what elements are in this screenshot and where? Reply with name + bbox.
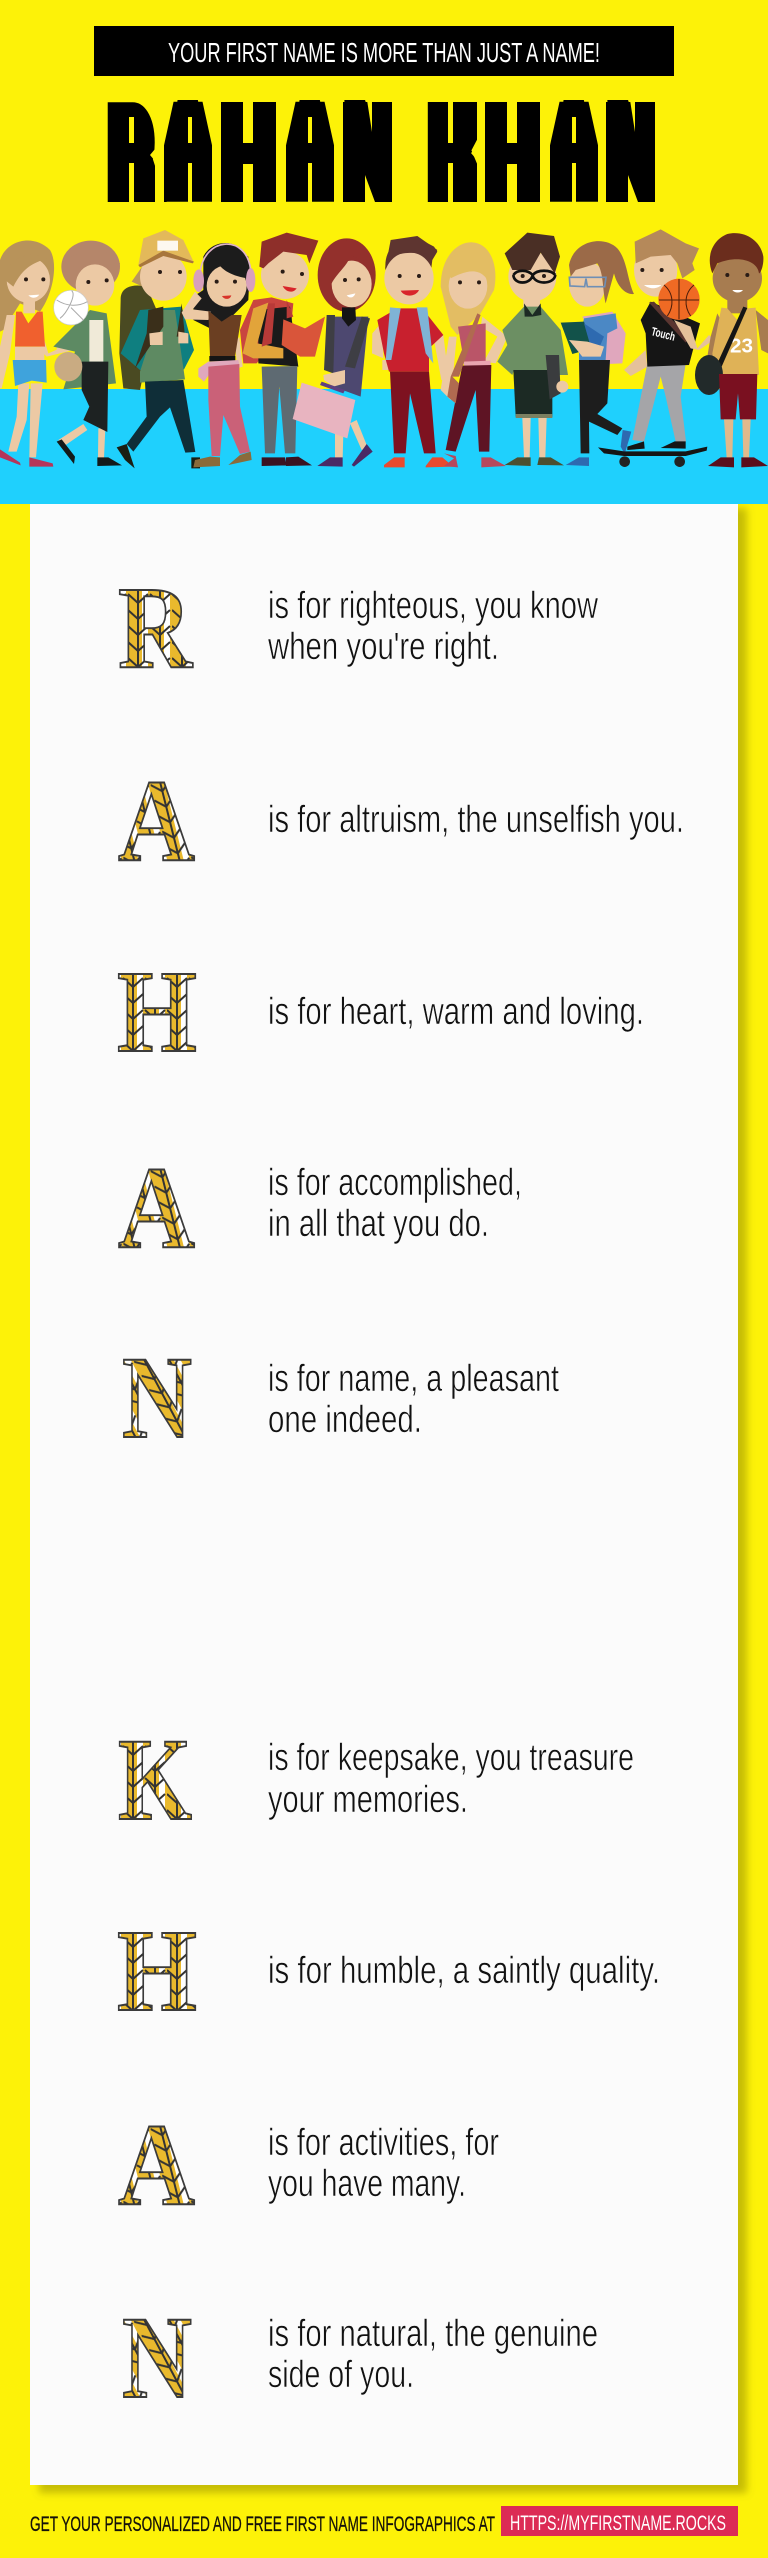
- row R: description: when you're right.: [267, 626, 499, 668]
- title: name: [118, 100, 644, 202]
- row A: description: in all that you do.: [268, 1203, 489, 1245]
- person 9: boy with glasses: [497, 233, 568, 466]
- person 3: hiker with backpack and cap: [117, 230, 200, 468]
- row K: description: [268, 1737, 634, 1821]
- row N: description: [268, 1358, 559, 1441]
- title: name: A: [559, 114, 589, 192]
- person 7: boy in red shirt: [372, 236, 453, 467]
- row H: description: is for humble, a saintly quality.: [268, 1950, 660, 1992]
- title: name: K: [439, 113, 465, 191]
- row A: description: [268, 1162, 522, 1245]
- footer call to action: GET YOUR PERSONALIZED AND FREE FIRST NAME INFOGRAPHICS AT: [30, 2513, 495, 2536]
- row N: description: is for natural, the genuine: [268, 2313, 598, 2355]
- person 4: girl with headphones: [182, 243, 255, 467]
- person 8: blonde girl: [441, 242, 507, 467]
- row N: description: is for name, a pleasant: [268, 1358, 559, 1400]
- row A: description: [268, 2122, 499, 2205]
- title: name: A: [295, 114, 325, 192]
- row H: description: is for heart, warm and loving.: [268, 991, 644, 1033]
- row A: letter icon: A: [118, 1142, 195, 1273]
- person 10: girl with ponytail and book: [561, 241, 634, 466]
- row A: description: is for activities, for: [268, 2122, 499, 2164]
- row H: letter icon: H: [117, 1905, 197, 2036]
- row A: description: you have many.: [268, 2163, 466, 2205]
- row R: letter icon: R: [118, 562, 194, 693]
- row A: description: is for accomplished,: [268, 1162, 522, 1204]
- row N: letter icon: N: [122, 2292, 192, 2423]
- blue floor band: [0, 389, 768, 504]
- person 12: boy with curly hair and tank top: 23: [730, 335, 753, 358]
- person 5: boy with book and red backpack: [240, 233, 325, 466]
- person 1: girl in orange top: [0, 241, 80, 467]
- row K: description: your memories.: [268, 1779, 468, 1821]
- row R: description: is for righteous, you know: [268, 585, 598, 627]
- row A: letter icon: A: [118, 2099, 195, 2230]
- person 12: boy with curly hair and tank top: [695, 233, 768, 467]
- tagline bar: [94, 26, 674, 76]
- illustration: group of twelve young people: [0, 229, 768, 468]
- white content panel: [30, 500, 738, 2485]
- row N: letter icon: N: [122, 1332, 192, 1463]
- title: name: R: [118, 113, 144, 191]
- row K: letter icon: K: [118, 1714, 192, 1845]
- title: name: N: [617, 113, 644, 191]
- title: name: A: [173, 114, 203, 192]
- title: name: H: [233, 114, 264, 192]
- person 2: girl with volleyball: [53, 241, 122, 466]
- person 11: boy on skateboard with basketball: [598, 229, 714, 467]
- person 6: girl with pink bag: [293, 238, 376, 467]
- title: name: N: [354, 113, 381, 191]
- row K: description: is for keepsake, you treasure: [268, 1737, 634, 1779]
- row R: description: [267, 585, 598, 668]
- row A: letter icon: A: [118, 755, 195, 886]
- person 11: boy on skateboard with basketball: Touch: [650, 324, 677, 344]
- row N: description: [268, 2313, 598, 2396]
- title: name: H: [497, 114, 528, 192]
- row N: description: side of you.: [268, 2354, 414, 2396]
- row N: description: one indeed.: [268, 1399, 422, 1441]
- row H: letter icon: H: [117, 946, 197, 1077]
